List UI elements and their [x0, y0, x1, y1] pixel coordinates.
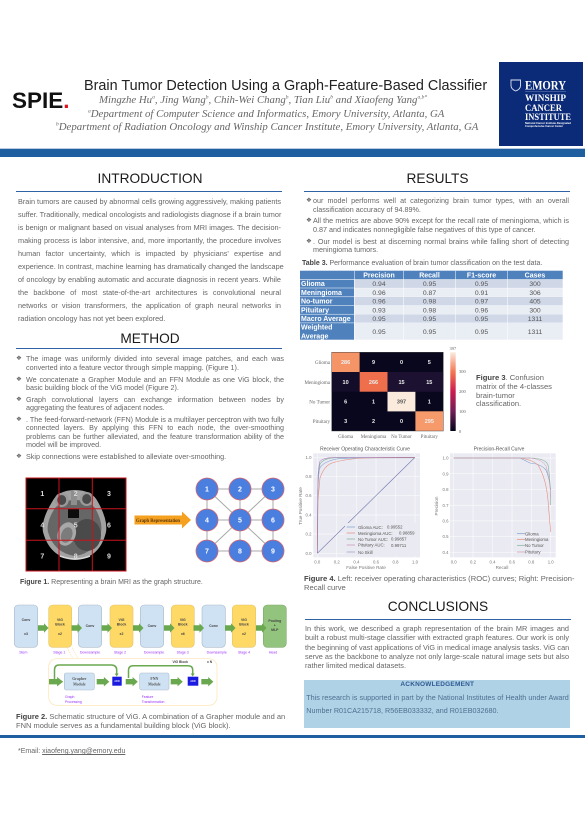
text: results bullets: classification accuracy of 94.89%. [313, 205, 421, 214]
caption: figure 1: Figure 1. Representing a brain MRI as the graph structure. [20, 579, 203, 586]
text: method bullets: Skip connections were established to alleviate over-smoothing. [26, 452, 226, 461]
figure 4: ROC curve: No Skill [358, 550, 373, 555]
stage boxes [14, 605, 286, 647]
text: method bullets: aggregating the features of adjacent nodes. [26, 403, 165, 412]
figure 4: ROC curve: 0.2 [306, 532, 312, 536]
table: performance evaluation: 0.95 [372, 316, 386, 323]
box labels: x2 [120, 632, 123, 636]
figure 4: precision-recall curve: Precision-Recall Curve [474, 446, 525, 452]
stage captions: Stage 4 [238, 650, 250, 654]
table: performance evaluation: 300 [529, 307, 541, 314]
figure 3: confusion matrix: 0 [400, 419, 403, 425]
table: performance evaluation: 0.91 [475, 290, 488, 297]
box labels: Block [55, 622, 65, 626]
figure 1: graph of nine nodes: 6 [271, 518, 275, 524]
caption: figure 2: FNN module serves as a fundamental building block (ViG block). [16, 721, 231, 730]
box labels: Conv [22, 618, 30, 622]
text: ❖ [16, 355, 22, 362]
arrow: graph representation [134, 512, 191, 528]
figure 3: confusion matrix: 3 [344, 419, 347, 425]
figure 4: ROC curve: False Positive Rate [346, 565, 386, 570]
text: acknowledgement body: Number R01CA215718, R56EB033332, and R01EB032680. [306, 706, 498, 715]
ViG block detail: Transformation [142, 700, 164, 704]
logo: Emory Winship Cancer Institute: CANCER [525, 103, 563, 114]
authors and affiliations: aDepartment of Computer Science and Informatics, Emory University, Atlanta, GA [88, 108, 444, 120]
table: performance evaluation [300, 270, 563, 340]
table: performance evaluation: 0.93 [372, 307, 386, 314]
figure 4: precision-recall curve: 0.5 [443, 534, 449, 539]
box labels [22, 618, 281, 636]
authors and affiliations: Mingzhe Hua, Jing Wangb, Chih-Wei Changb, Tian Liub and Xiaofeng Yanga,b* [99, 94, 427, 106]
figure 4: ROC curve: 0.4 [353, 560, 360, 564]
text: method bullets: The image was uniformly divided into several image patches, and each was [26, 354, 284, 363]
text: method bullets [16, 354, 284, 461]
figure 3: confusion matrix: 1 [372, 400, 375, 406]
figure 3: confusion matrix: 300 [459, 369, 466, 374]
box labels: Conv [86, 624, 94, 628]
text: conclusions body: built a robust multi-stage classifier with extracted graph features. Our work is only [305, 633, 569, 642]
text: introduction body: making process is labor intensive, and, more importantly, the procedure involves [18, 236, 281, 245]
figure 3: confusion matrix: Glioma [338, 435, 354, 440]
text: ❖ [16, 376, 22, 382]
text: conclusions body: In this work, we described a graph representation of the brain MR images and [305, 624, 569, 633]
figure 4: ROC curve: Meningioma AUC: [358, 531, 393, 536]
figure 1: graph of nine nodes: 2 [238, 486, 242, 494]
ViG block detail: Graph [65, 695, 75, 699]
figure 4: precision-recall curve: 1.0 [443, 456, 449, 460]
figure 1: brain MRI divided into patches: 5 [74, 522, 78, 530]
ViG block detail: Processing [65, 700, 82, 704]
figure 4: ROC curve [298, 446, 420, 570]
text: method bullets: converted into a feature vector through simple mapping. (Figure 1). [26, 363, 239, 372]
caption: figure 3: classification. [476, 399, 521, 408]
ViG block detail: Feature [142, 695, 153, 699]
figure 1: brain MRI divided into patches: 8 [74, 554, 78, 560]
stage captions: Downsample [207, 650, 227, 654]
figure 3: confusion matrix: Meningioma [361, 435, 387, 440]
box labels: Conv [148, 624, 156, 628]
box labels: ViG [180, 618, 186, 622]
figure 3: confusion matrix: 100 [459, 409, 466, 414]
logo: Emory Winship Cancer Institute [499, 62, 583, 146]
logo: Emory Winship Cancer Institute: National Cancer Institute-Designated [525, 122, 571, 125]
text: conclusions body: rather limited medical datasets. [305, 661, 406, 670]
ViG block detail: Grapher [72, 677, 87, 681]
figure 4: precision-recall curve: Recall [496, 565, 508, 570]
stage captions: Downsample [80, 650, 100, 654]
box labels: ViG [241, 618, 247, 622]
figure 4: ROC curve: 0.4 [306, 512, 312, 518]
text: method bullets: problems can be further alleviated, and the feature transformation ability of the [26, 432, 284, 441]
figure 4: precision-recall curve: 0.7 [443, 503, 449, 508]
figure 3: confusion matrix: 397 [450, 346, 457, 351]
figure 1: graph of nine nodes: 1 [205, 486, 209, 494]
figure 4: precision-recall curve: 0.8 [443, 487, 449, 492]
table: performance evaluation: 1311 [528, 329, 543, 336]
panel: acknowledgement [304, 680, 570, 728]
caption: figure 3: Figure 3. Confusion [476, 373, 544, 382]
figure 3: confusion matrix: 0 [459, 429, 462, 434]
caption: figure 4: Recall curve [304, 583, 346, 592]
figure 3: confusion matrix: 6 [344, 400, 347, 406]
table: performance evaluation: Precision [363, 272, 395, 280]
figure 3: confusion matrix: No Tumor [391, 435, 412, 440]
ViG block detail [49, 659, 217, 705]
figure 3: confusion matrix: 200 [459, 389, 466, 394]
figure 3: confusion matrix: 9 [372, 360, 375, 366]
caption: figure 3 [476, 373, 552, 408]
figure 3: confusion matrix: 15 [398, 380, 405, 386]
table: performance evaluation: 1311 [528, 316, 543, 323]
text: introduction body: of oncology by enabling automatic and accurate diagnosis in recent years. While [18, 275, 281, 284]
heading: conclusions: CONCLUSIONS [388, 599, 488, 614]
figure 4: precision-recall curve: 0.2 [470, 560, 477, 564]
figure 4: precision-recall curve: Precision [434, 496, 439, 515]
table: performance evaluation: Cases [525, 272, 545, 280]
figure 4: precision-recall curve: Pituitary [525, 550, 541, 554]
title: Brain Tumor Detection Using a Graph-Feature-Based Classifier [84, 78, 487, 94]
box labels: ViG [119, 618, 125, 622]
figure 4: ROC curve: Pituitary AUC: [358, 542, 385, 548]
table: performance evaluation: 0.96 [372, 299, 386, 306]
figure 3: confusion matrix: 10 [343, 380, 349, 386]
box labels: Conv [209, 624, 218, 628]
box labels: x3 [24, 632, 28, 636]
text: method bullets: connected layers. By applying this FFN to each node, the over-smoothing [26, 423, 284, 432]
ViG block detail: FNN [150, 677, 158, 681]
box labels: Block [117, 622, 126, 626]
text: ❖ [306, 217, 312, 224]
logo: Emory Winship Cancer Institute: EMORY [525, 78, 566, 92]
caption: figure 4: Figure 4. Left: receiver operating characteristics (ROC) curves; Right: Precision- [304, 574, 575, 583]
table: performance evaluation: 0.95 [475, 329, 488, 336]
figure 1: graph of nine nodes: 3 [271, 486, 275, 494]
text: acknowledgement body: This research is supported in part by the National Institutes of Health under Award [306, 693, 569, 702]
stage captions [19, 650, 277, 654]
table: performance evaluation: 0.97 [475, 299, 488, 306]
table: performance evaluation: F1-score [467, 272, 496, 280]
figure 4: precision-recall curve: 0.0 [451, 560, 457, 564]
heading: introduction: INTRODUCTION [98, 171, 202, 186]
figure 4: ROC curve: Receiver Operating Characteristic Curve [320, 446, 410, 452]
figure 3: confusion matrix: Pituitary [421, 435, 438, 440]
table: performance evaluation: No-tumor [301, 299, 333, 306]
table: performance evaluation: 0.95 [423, 329, 436, 336]
top blue band [0, 148, 585, 156]
authors and affiliations [56, 94, 478, 132]
heading: acknowledgement: ACKNOWLEDGEMENT [400, 681, 474, 688]
figure 3: confusion matrix: Meningioma [304, 381, 331, 386]
figure 3: confusion matrix: 15 [426, 380, 432, 386]
stage captions: Stage 1 [53, 650, 65, 654]
box labels: Block [239, 622, 249, 626]
text: results bullets: 0.87 and indicates nonnegligible false negatives of this type of cancer. [313, 225, 536, 234]
figure 4: ROC curve: 0.8 [393, 560, 399, 564]
heading: results: RESULTS [406, 171, 469, 186]
figure 1: graph of nine nodes: 4 [205, 518, 209, 524]
figure 1: brain MRI divided into patches: 4 [40, 522, 44, 530]
text: results bullets: . Our model is best at discerning normal brains while falling short of detecting [313, 236, 569, 246]
figure 4: precision-recall curve: 0.6 [443, 518, 449, 524]
icon: head scan [43, 490, 106, 560]
figure 3: confusion matrix: 286 [341, 360, 350, 366]
text: ❖ [306, 238, 312, 244]
caption: figure 3: matrix of the 4-classes [476, 382, 552, 391]
logo: Emory Winship Cancer Institute: WINSHIP [525, 93, 566, 104]
figure 1: graph of nine nodes: 5 [238, 518, 242, 524]
table: performance evaluation: 0.96 [475, 307, 488, 314]
ViG block detail: Module [148, 682, 161, 686]
figure 4: precision-recall curve: 0.6 [509, 560, 516, 564]
figure 4: ROC curve: Glioma AUC: [358, 525, 383, 530]
box labels: MLP [271, 628, 279, 632]
figure 4: ROC curve: 0.99857 [391, 536, 407, 542]
figure 3: confusion matrix: 397 [397, 400, 406, 406]
text: introduction body: networks or vision transformers, the application of graph neural networks in [18, 301, 281, 310]
table: performance evaluation: Recall [419, 272, 440, 280]
ViG block detail: ViG Block [172, 660, 188, 664]
ViG block detail: ADD [190, 679, 196, 683]
table: performance evaluation: 405 [529, 299, 541, 306]
figure 3: confusion matrix: 295 [425, 419, 434, 425]
figure 4: precision-recall curve: 0.4 [490, 560, 496, 564]
figure 4: ROC curve: 0.0 [306, 551, 312, 556]
table: performance evaluation: Macro Average [301, 316, 351, 323]
table: performance evaluation: Pituitary [301, 307, 329, 314]
figure 1: brain MRI divided into patches: 7 [40, 554, 44, 560]
table: performance evaluation: 0.94 [372, 281, 386, 288]
text: email: *Email: xiaofeng.yang@emory.edu [18, 748, 125, 755]
logo: Emory Winship Cancer Institute: Comprehensive Cancer Center [525, 125, 563, 128]
text: introduction body: human factor uncertainty, which is impacted by physicians' expertise and [18, 249, 281, 258]
text: ❖ [16, 453, 22, 460]
text: ❖ [16, 416, 22, 422]
figure 4: precision-recall curve: Glioma [525, 532, 539, 536]
caption: figure 3: brain-tumor [476, 391, 515, 400]
figure 1: graph of nine nodes: 7 [205, 548, 209, 556]
text: acknowledgement body [306, 693, 569, 715]
figure 4: ROC curve: 0.8 [306, 474, 312, 479]
stage captions: Head [269, 650, 277, 654]
text: conclusions body: the beginning of vast applications of ViG in medical image analysis tasks. ViG can [305, 643, 569, 652]
caption: table 3: Table 3. Performance evaluation of brain tumor classification on the test data. [302, 260, 542, 267]
figure 4: precision-recall curve: Meningioma [525, 537, 549, 542]
figure 3: confusion matrix: 266 [369, 380, 378, 386]
table: performance evaluation: Glioma [301, 281, 325, 288]
figure 4: precision-recall curve: 1.0 [548, 560, 554, 564]
figure 4: ROC curve: 1.0 [412, 560, 419, 564]
text: method bullets: model will be improved. [26, 440, 101, 449]
figure 3: confusion matrix: 0 [400, 360, 403, 366]
table: performance evaluation: 300 [529, 281, 541, 288]
table: performance evaluation: 0.95 [423, 281, 436, 288]
figure 4: ROC curve: 0.99552 [387, 524, 403, 530]
text: results bullets: All the metrics are above 90% except for the recall rate of meningioma, which is [313, 216, 569, 225]
box labels: + [274, 624, 276, 628]
box labels: x2 [58, 632, 62, 636]
text: introduction body: experience. In contrast, machine learning has dramatically changed the landscape [18, 262, 284, 271]
figure 1: brain MRI divided into patches: 1 [40, 491, 44, 498]
box labels: Block [178, 622, 188, 626]
text: introduction body: radiation oncology has not yet been explored. [18, 314, 165, 323]
figure 4: ROC curve: 0.99711 [391, 543, 407, 548]
figure 4: precision-recall curve: No Tumor [525, 543, 544, 548]
stage captions: Stage 2 [114, 650, 126, 654]
logo: Emory Winship Cancer Institute: INSTITUTE [525, 112, 571, 123]
figure 3: confusion matrix: 1 [428, 400, 431, 406]
box labels: Pooling [268, 619, 281, 623]
box labels: x6 [181, 632, 185, 636]
figure 1: brain MRI divided into patches: 6 [107, 522, 111, 530]
table: performance evaluation: 306 [529, 290, 541, 297]
text: method bullets: basic building block of the ViG model (Figure 2). [26, 383, 179, 392]
table: performance evaluation: 0.98 [423, 307, 436, 314]
text: method bullets: We concatenate a Grapher Module and an FFN Module as one ViG block, the [26, 374, 284, 384]
figure 1: brain MRI divided into patches: 2 [74, 491, 78, 498]
figure 4: ROC curve: 0.98859 [399, 530, 415, 536]
text: conclusions body: serve as the backbone to analyze not only large-scale natural image sets but also [305, 652, 569, 661]
stage captions: Stem [19, 650, 27, 654]
authors and affiliations: bDepartment of Radiation Oncology and Winship Cancer Institute, Emory University, Atlanta, GA [56, 120, 478, 132]
text: results bullets: meningioma tumors. [313, 245, 378, 254]
figure 1: brain MRI divided into patches: 3 [107, 491, 111, 498]
figure 1: graph of nine nodes: 9 [271, 548, 275, 556]
figure 4: ROC curve: 0.2 [334, 560, 340, 564]
figure 1: brain MRI divided into patches: 9 [107, 554, 111, 560]
text: ❖ [306, 197, 312, 204]
text: method bullets: . The feed-forward-network (FFN) Module is a multilayer perceptron with two fully [26, 414, 284, 424]
text: ❖ [16, 396, 22, 402]
table: performance evaluation: 0.87 [423, 290, 436, 297]
box labels: x2 [242, 632, 246, 636]
figure 4: ROC curve: 0.0 [314, 560, 321, 564]
figure 4: ROC curve: 1.0 [306, 455, 312, 460]
box labels: ViG [57, 618, 63, 622]
table: performance evaluation: 0.96 [372, 290, 386, 297]
table: performance evaluation: 0.95 [475, 316, 488, 323]
logo: SPIE: SPIE. [12, 88, 70, 112]
arrow: graph representation: Graph Representation [136, 519, 180, 524]
figure 4: precision-recall curve: 0.8 [528, 560, 535, 564]
figure 4: ROC curve: No Tumor AUC: [358, 537, 388, 542]
figure 4: precision-recall curve: 0.4 [443, 550, 449, 555]
bottom blue band [0, 735, 585, 738]
figure 2: ViG architecture diagram [14, 604, 287, 706]
stage captions: Stage 3 [177, 650, 189, 654]
text: introduction body: suffer. Traditionally, medical oncologists and radiologists diagnose if a brain tumor [18, 210, 281, 219]
text: introduction body: the backbone of most state-of-the-art architectures is convolutional neural [18, 288, 281, 297]
table: performance evaluation: Weighted [301, 325, 332, 332]
figure 1: graph of nine nodes [196, 478, 284, 562]
table: performance evaluation: 0.95 [423, 316, 436, 323]
text: results bullets: our model performs well at categorizing brain tumor types, with an overall [313, 196, 569, 205]
text: method bullets: Graph convolutional layers can exchange information between nodes by [26, 394, 284, 404]
figure 3: confusion matrix: Pituitary [313, 420, 330, 425]
figure 1: brain MRI divided into patches [26, 478, 126, 572]
text: introduction body: Brain tumors are caused by abnormal cells growing aggressively, making patients [18, 197, 281, 206]
stage captions: Downsample [144, 650, 164, 654]
figure 3: confusion matrix: Glioma [315, 361, 331, 366]
figure 4: ROC curve: True Positive Rate [298, 487, 303, 525]
figure 4: precision-recall curve: 0.9 [443, 472, 449, 476]
table: performance evaluation: 0.95 [475, 281, 488, 288]
ViG block detail: x N [207, 660, 213, 664]
figure 3: confusion matrix: No Tumor [309, 400, 330, 406]
text: introduction body: is benign or malignant based on visual analyses from MRI images. The decision- [18, 223, 281, 232]
caption: figure 2: Figure 2. Schematic structure of ViG. A combination of a Grapher module and an [16, 712, 285, 721]
figure 4: precision-recall curve [434, 446, 556, 570]
text: conclusions body [305, 624, 569, 670]
figure 4: ROC curve: 0.6 [373, 560, 380, 564]
figure 3: confusion matrix: 5 [428, 360, 431, 366]
ViG block detail: ADD [114, 679, 120, 683]
figure 3: confusion matrix: 2 [372, 419, 375, 425]
text: results bullets [306, 196, 569, 254]
figure 4: ROC curve: 0.6 [306, 493, 312, 498]
figure 1: graph of nine nodes: 8 [238, 548, 242, 556]
table: performance evaluation: 0.98 [423, 299, 436, 306]
caption: figure 4 [304, 574, 575, 592]
text: introduction body [18, 197, 284, 323]
heading: method: METHOD [120, 331, 180, 346]
caption: figure 2 [16, 712, 285, 730]
table: performance evaluation: Meningioma [301, 290, 342, 297]
figure 3: confusion matrix [304, 346, 466, 440]
table: performance evaluation: 0.95 [372, 329, 386, 336]
ViG block detail: Module [73, 682, 86, 686]
